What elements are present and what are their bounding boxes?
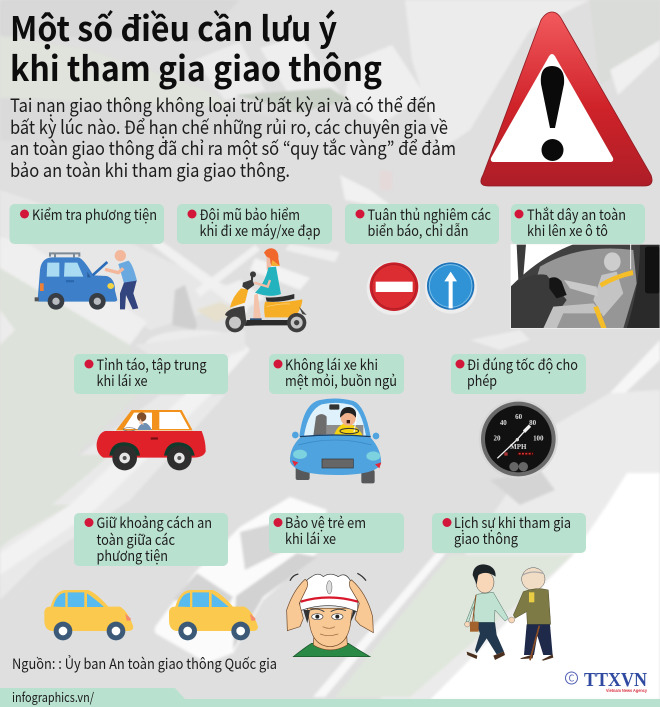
icon: blue car and mechanic <box>35 250 138 310</box>
panel: tỉnh táo, tập trung: Tỉnh táo, tập trung <box>96 354 206 375</box>
intro text block: Tai nạn giao thông không loại trừ bất kỳ ai và có thể đến <box>10 92 436 118</box>
panel: thắt dây an toàn <box>511 204 645 244</box>
panel: đội mũ bảo hiểm: Đội mũ bảo hiểm <box>200 204 300 225</box>
icon: boy putting on helmet <box>287 573 373 657</box>
icon: red car with driver <box>97 410 206 470</box>
panel: tỉnh táo, tập trung <box>74 354 228 394</box>
source line: Nguồn: : Ủy ban An toàn giao thông Quốc gia <box>12 653 277 674</box>
panel: giữ khoảng cách: phương tiện <box>96 545 168 566</box>
intro text block: bất kỳ lúc nào. Để hạn chế những rủi ro, các chuyên gia về <box>10 114 448 140</box>
panel: đội mũ bảo hiểm <box>177 204 332 244</box>
intro text block: an toàn giao thông đã chỉ ra một số “quy tắc vàng” để đảm <box>10 135 456 161</box>
icon: speedometer: 40 <box>500 419 507 427</box>
panel: bảo vệ trẻ em: khi lái xe <box>285 528 336 549</box>
icon: first yellow car <box>44 590 133 640</box>
panel: giữ khoảng cách: toàn giữa các <box>96 529 175 550</box>
logo: TTXVN <box>566 669 647 693</box>
panel: giữ khoảng cách: Giữ khoảng cách an <box>96 512 212 533</box>
intro text block <box>10 92 456 183</box>
logo: TTXVN: Vietnam News Agency <box>606 688 647 693</box>
icon: traffic signs <box>367 262 477 315</box>
footer band <box>0 687 660 707</box>
icon: speedometer: MPH <box>510 443 527 451</box>
title: khi tham gia giao thông <box>10 42 382 91</box>
panel: giữ khoảng cách <box>74 512 228 566</box>
panel: đi đúng tốc độ: Đi đúng tốc độ cho <box>467 354 578 375</box>
panel: kiểm tra phương tiện <box>10 204 164 244</box>
icon: seat belt photo <box>511 244 660 328</box>
intro text block: bảo an toàn khi tham gia giao thông. <box>10 157 290 183</box>
footer band: infographics.vn/ <box>12 687 94 706</box>
panel: bảo vệ trẻ em <box>269 512 404 553</box>
logo: TTXVN: C <box>569 672 575 684</box>
panel: tuân thủ biển báo: biển báo, chỉ dẫn <box>368 220 468 241</box>
panel: lịch sự khi tham gia giao thông: giao thông <box>454 528 518 549</box>
icon: woman on scooter <box>225 248 307 332</box>
icon: young man helping elderly man <box>465 564 553 661</box>
panel: thắt dây an toàn: Thắt dây an toàn <box>527 204 626 225</box>
icon: speedometer <box>479 399 558 479</box>
panel: lịch sự khi tham gia giao thông: Lịch sự khi tham gia <box>454 512 571 533</box>
icon: speedometer: 60 <box>515 413 523 421</box>
panel: tuân thủ biển báo <box>345 204 499 244</box>
panel: đi đúng tốc độ: phép <box>467 370 497 391</box>
logo: TTXVN: TTXVN <box>584 669 647 691</box>
title <box>10 2 382 91</box>
panel: lịch sự khi tham gia giao thông <box>432 512 586 553</box>
panel: không lái xe khi mệt mỏi: mệt mỏi, buồn ngủ <box>285 370 397 391</box>
panel: tuân thủ biển báo: Tuân thủ nghiêm các <box>368 204 491 225</box>
icon: speedometer: 100 <box>533 435 544 443</box>
title: Một số điều cần lưu ý <box>10 2 337 51</box>
panel: đội mũ bảo hiểm: khi đi xe máy/xe đạp <box>200 220 321 241</box>
icon: sleepy driver in blue car <box>290 399 381 483</box>
panel: đi đúng tốc độ <box>451 354 586 394</box>
panel: kiểm tra phương tiện: Kiểm tra phương tiện <box>32 204 157 225</box>
panel: bảo vệ trẻ em: Bảo vệ trẻ em <box>285 512 366 533</box>
icon: speedometer: 20 <box>493 435 501 443</box>
panel: tỉnh táo, tập trung: khi lái xe <box>96 370 148 391</box>
icon: second yellow car <box>169 590 258 640</box>
panel: không lái xe khi mệt mỏi <box>269 354 404 394</box>
panel: thắt dây an toàn: khi lên xe ô tô <box>527 220 608 241</box>
panel: không lái xe khi mệt mỏi: Không lái xe khi <box>285 354 378 375</box>
icon: speedometer: 80 <box>529 419 537 427</box>
icon: warning triangle <box>481 12 652 186</box>
